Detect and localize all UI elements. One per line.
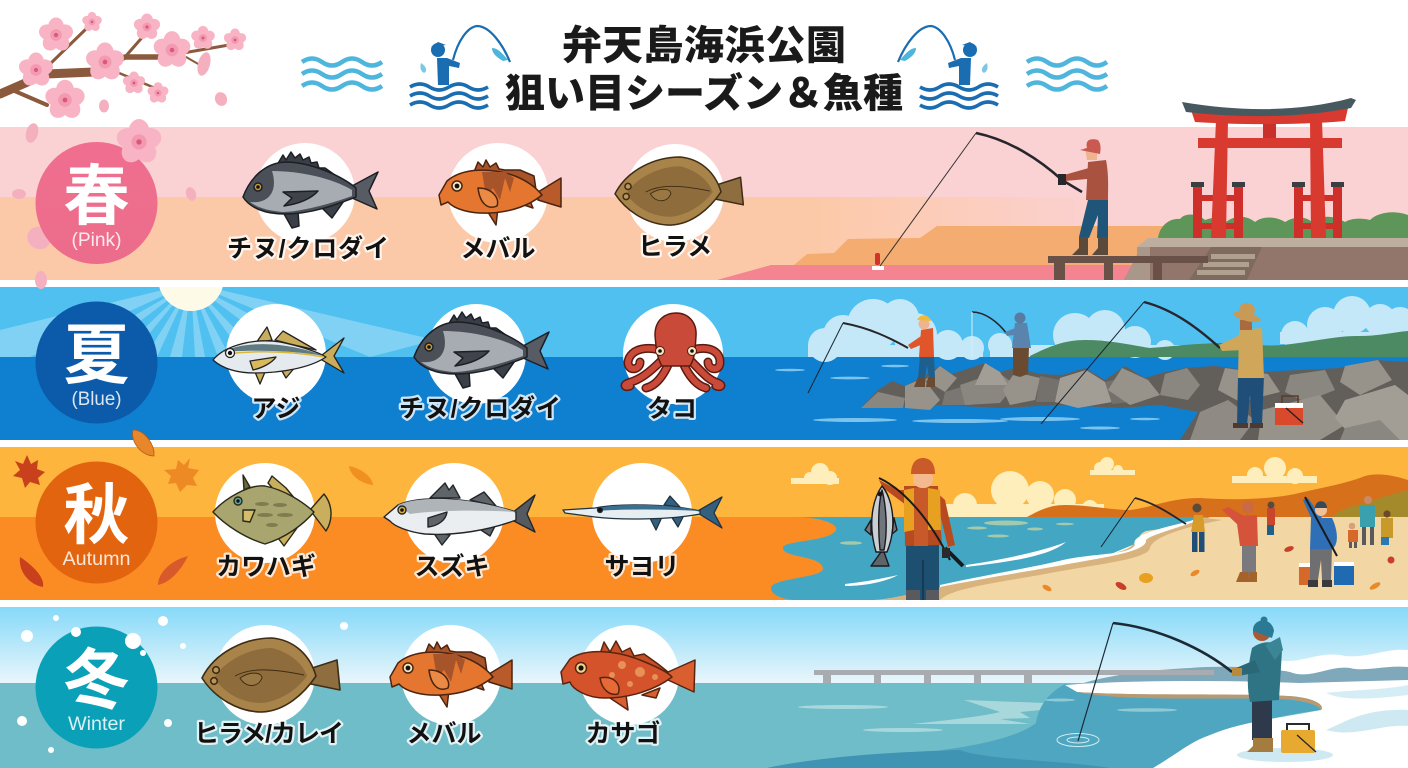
summer badge: (Blue) [72, 389, 122, 410]
cherry branch [0, 12, 247, 289]
species: hirame winter [194, 625, 344, 748]
fallen leaves on beach [1041, 545, 1394, 593]
foam [940, 517, 1208, 587]
red cooler [1275, 396, 1303, 425]
winter sky [0, 607, 1408, 683]
angler summer centre [972, 312, 1031, 377]
autumn badge: Autumn [62, 549, 130, 570]
icon: fisherman right [898, 26, 998, 108]
autumn water [771, 517, 1200, 600]
species: chinu summer: チヌ/クロダイ [399, 394, 561, 423]
blue jacket angler and coolers [1299, 497, 1354, 587]
angler summer left [808, 315, 935, 393]
sun rays [0, 290, 424, 357]
bobber [872, 253, 884, 270]
winter badge: Winter [68, 714, 126, 735]
pier [814, 670, 1214, 690]
snow dots [17, 615, 348, 753]
spring badge [36, 142, 158, 264]
species: mebaru spring: メバル [460, 235, 536, 263]
spring lower peach band [0, 197, 1070, 280]
cloud left [808, 299, 984, 362]
jetty rocks [861, 360, 1408, 440]
species: mebaru spring [439, 143, 561, 263]
spring pink water [717, 265, 1140, 280]
winter angler [1232, 616, 1283, 752]
top header area [0, 0, 1408, 127]
winter water [0, 683, 1408, 768]
header waves left [302, 58, 382, 90]
people on beach [1222, 496, 1393, 582]
header waves right [1027, 58, 1107, 90]
blossoms [17, 12, 247, 122]
summer water [0, 357, 1408, 440]
species: kawahagi autumn: カワハギ [216, 553, 316, 581]
beach sand [875, 517, 1408, 600]
wet sand [875, 518, 1222, 600]
branch [0, 28, 229, 105]
species: chinu spring: チヌ/クロダイ [227, 234, 389, 263]
species: tako summer [623, 304, 723, 423]
spring badge: (Pink) [72, 230, 122, 251]
species: kasago winter [561, 625, 695, 748]
panel: winter [0, 607, 1408, 768]
species: suzuki autumn: スズキ [414, 552, 490, 581]
panel: summer [0, 287, 1408, 440]
fishing line and rod [880, 133, 1082, 266]
autumn clouds [791, 457, 1317, 517]
species: suzuki autumn [384, 463, 535, 581]
panel: autumn [0, 447, 1408, 600]
sun [159, 287, 223, 311]
species: aji summer: アジ [251, 395, 301, 423]
icon: fisherman left [410, 26, 510, 108]
title: 弁天島海浜公園 [562, 24, 846, 68]
species: hirame spring [615, 144, 743, 261]
overlapping blossom [114, 119, 164, 167]
autumn orange band [0, 517, 900, 600]
big angler with fish [879, 458, 963, 600]
species: mebaru winter: メバル [406, 720, 482, 748]
autumn badge: 秋 [64, 478, 130, 552]
distant snow [1279, 650, 1408, 700]
water ripples [775, 365, 1160, 430]
summer badge: 夏 [64, 318, 130, 392]
cloud centre [988, 310, 1180, 360]
bushes behind torii [1158, 212, 1408, 238]
small angler on shore [1101, 498, 1205, 552]
angler summer right [1041, 302, 1264, 428]
lagoon deep water [767, 750, 1110, 768]
yellow tackle box [1281, 724, 1316, 753]
autumn sky [0, 447, 1408, 517]
winter badge: 冬 [64, 643, 130, 717]
ripples at line entry [1057, 734, 1099, 746]
stone platform [1124, 238, 1408, 280]
species: kasago winter: カサゴ [585, 719, 661, 748]
summer sky [0, 287, 1408, 357]
title [505, 24, 903, 116]
lagoon ice [1045, 698, 1177, 712]
spring band background [0, 127, 1408, 238]
spring orange hills [794, 226, 1175, 265]
winter badge [36, 626, 158, 748]
ice patches [798, 700, 1062, 732]
species: tako summer: タコ [647, 395, 697, 423]
autumn leaves [13, 430, 373, 587]
species: mebaru winter [390, 625, 512, 748]
species: hirame spring: ヒラメ [638, 233, 712, 261]
species: sayori autumn [563, 463, 722, 581]
winter rod and line [1078, 623, 1232, 741]
species: chinu summer [399, 304, 561, 423]
torii gate [1182, 98, 1356, 238]
species: sayori autumn: サヨリ [604, 553, 680, 581]
winter mountains [1063, 667, 1408, 690]
angler spring [1058, 139, 1108, 255]
spring badge: 春 [64, 159, 130, 233]
fish held by angler [865, 486, 897, 566]
shore and snow [1065, 680, 1408, 768]
autumn badge [36, 462, 158, 584]
panel: spring [0, 127, 1408, 280]
species: aji summer [213, 304, 344, 423]
summer badge [36, 302, 158, 424]
autumn hills [1027, 474, 1408, 520]
species: kawahagi autumn [213, 463, 331, 581]
species: chinu spring [227, 143, 389, 263]
species: hirame winter: ヒラメ/カレイ [194, 720, 344, 748]
dock [1048, 256, 1208, 280]
title: 狙い目シーズン＆魚種 [505, 71, 903, 116]
water highlights [840, 520, 1074, 545]
winter lagoon [767, 684, 1321, 768]
far green hills [1030, 331, 1408, 357]
falling petals [12, 51, 229, 289]
cloud right [1280, 296, 1408, 349]
